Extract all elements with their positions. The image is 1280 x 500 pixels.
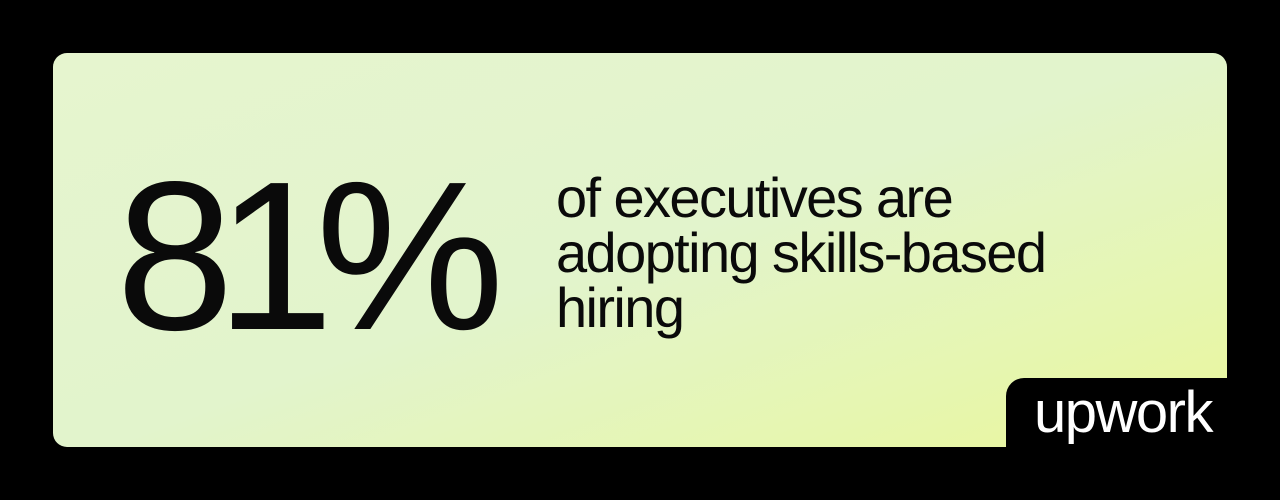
- text block: description: [556, 166, 1045, 339]
- logo: upwork: upwork: [1034, 380, 1212, 445]
- text block: description: adopting skills-based: [556, 221, 1045, 284]
- text block: description: of executives are: [556, 166, 952, 229]
- notch: [1006, 378, 1246, 468]
- text block: description: hiring: [556, 276, 683, 339]
- stat: 81%: 81%: [116, 137, 486, 374]
- panel: card: [53, 53, 1227, 447]
